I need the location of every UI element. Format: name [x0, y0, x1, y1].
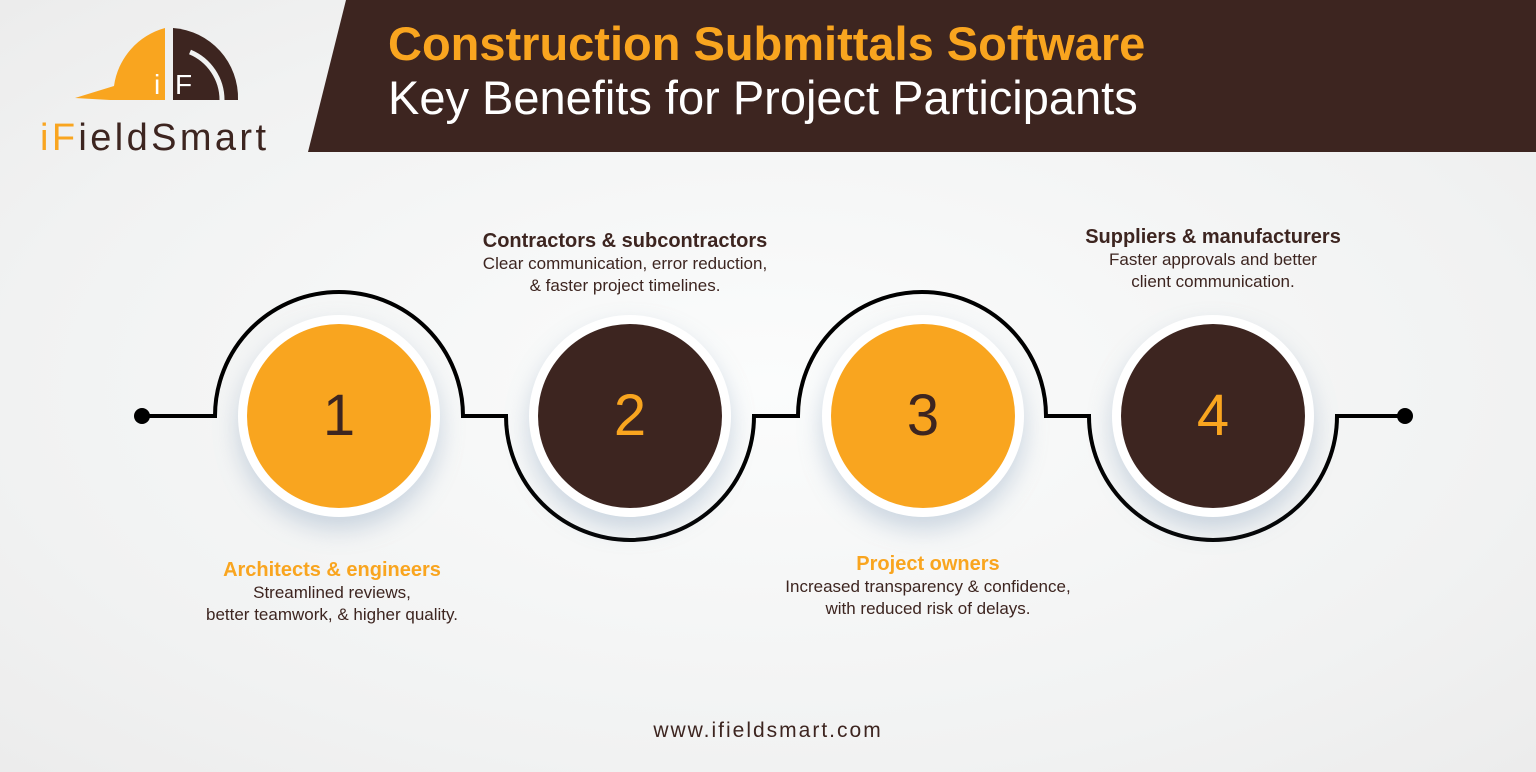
text: suppliers: Suppliers & manufacturers — [1085, 226, 1341, 248]
title: Construction Submittals Software — [388, 17, 1145, 70]
logo — [40, 28, 270, 154]
logo: i — [154, 69, 160, 100]
text: suppliers: client communication. — [1131, 272, 1295, 291]
text: contractors: & faster project timelines. — [530, 276, 720, 295]
text: contractors — [483, 230, 767, 295]
text: architects: better teamwork, & higher quality. — [206, 605, 458, 624]
circle 2: 2 — [614, 383, 646, 448]
text: contractors: Contractors & subcontractors — [483, 230, 767, 252]
circle 4 — [1112, 315, 1314, 517]
circle 1: 1 — [323, 383, 355, 448]
text: architects: Architects & engineers — [223, 559, 441, 581]
header band — [308, 0, 1536, 152]
circle 2 — [529, 315, 731, 517]
text: owners — [785, 553, 1071, 618]
text: owners: Increased transparency & confidence, — [785, 577, 1071, 596]
text: owners: Project owners — [856, 553, 1000, 575]
title: Key Benefits for Project Participants — [388, 71, 1138, 124]
text: contractors: Clear communication, error reduction, — [483, 254, 767, 273]
text: suppliers: Faster approvals and better — [1109, 250, 1317, 269]
circle 3: 3 — [907, 383, 939, 448]
website: www.ifieldsmart.com — [653, 719, 883, 742]
text: architects — [206, 559, 458, 624]
text: owners: with reduced risk of delays. — [825, 599, 1031, 618]
circle 3 — [822, 315, 1024, 517]
text: architects: Streamlined reviews, — [253, 583, 411, 602]
title — [388, 17, 1145, 124]
circle 1 — [238, 315, 440, 517]
logo: F — [175, 69, 192, 100]
text: suppliers — [1085, 226, 1341, 291]
circle 4: 4 — [1197, 383, 1229, 448]
